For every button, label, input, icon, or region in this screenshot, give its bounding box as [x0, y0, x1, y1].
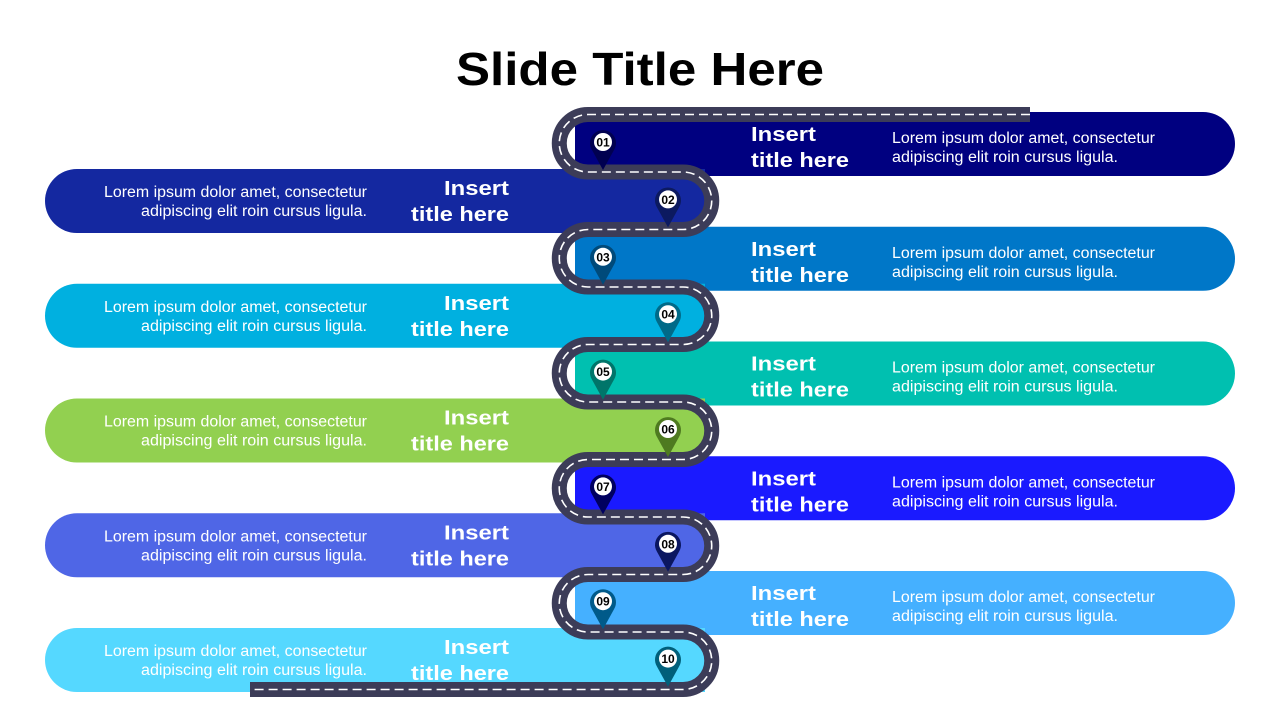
pin 09	[590, 589, 616, 629]
band 03: Lorem ipsum dolor amet, consectetur	[892, 245, 1155, 262]
band 06: title here	[411, 434, 509, 456]
band 05	[575, 342, 1235, 406]
band 09: title here	[751, 609, 849, 631]
band 04	[45, 284, 705, 348]
band 06: Insert	[444, 408, 509, 430]
band 06	[45, 398, 705, 462]
pin 01	[590, 130, 616, 170]
pin 04	[655, 302, 681, 342]
band 10	[45, 628, 705, 692]
band 02: Lorem ipsum dolor amet, consectetur	[104, 184, 367, 201]
band 05: Insert	[751, 354, 816, 376]
band 07: Lorem ipsum dolor amet, consectetur	[892, 474, 1155, 491]
band 05: Lorem ipsum dolor amet, consectetur	[892, 360, 1155, 376]
band 02: title here	[411, 204, 509, 226]
pin 03	[590, 245, 616, 285]
band 08: Insert	[444, 522, 509, 544]
band 02: Insert	[444, 178, 509, 200]
band 04: Insert	[444, 293, 509, 315]
pin 03: 03	[596, 250, 610, 264]
band 02: adipiscing elit roin cursus ligula.	[141, 203, 367, 220]
band 06: Lorem ipsum dolor amet, consectetur	[104, 414, 367, 430]
pin 08: 08	[661, 537, 675, 551]
pin 08	[655, 532, 681, 572]
band 01	[575, 112, 1235, 176]
pin 09: 09	[596, 595, 610, 609]
pin 05	[590, 360, 616, 400]
pin 07	[590, 474, 616, 514]
band 09	[575, 571, 1235, 635]
band 04: title here	[411, 319, 509, 341]
pin 10: 10	[661, 652, 675, 666]
pin 02	[655, 187, 681, 227]
band 07: adipiscing elit roin cursus ligula.	[892, 493, 1118, 510]
band 08: adipiscing elit roin cursus ligula.	[141, 547, 367, 564]
band 03: Insert	[751, 239, 816, 261]
band 01: Lorem ipsum dolor amet, consectetur	[892, 130, 1155, 147]
pin 01: 01	[596, 136, 610, 150]
band 04: Lorem ipsum dolor amet, consectetur	[104, 299, 367, 316]
band 07	[575, 456, 1235, 520]
pin 10	[655, 647, 681, 687]
pin 05: 05	[596, 365, 610, 379]
band 09: Lorem ipsum dolor amet, consectetur	[892, 589, 1155, 606]
band 07: Insert	[751, 468, 816, 490]
band 10: Insert	[444, 637, 509, 659]
band 03: title here	[751, 265, 849, 287]
pin 07: 07	[596, 480, 610, 494]
band 01: adipiscing elit roin cursus ligula.	[892, 149, 1118, 166]
band 05: title here	[751, 380, 849, 402]
band 10: adipiscing elit roin cursus ligula.	[141, 662, 367, 679]
band 08	[45, 513, 705, 577]
band 05: adipiscing elit roin cursus ligula.	[892, 378, 1118, 396]
pin 06: 06	[661, 422, 675, 436]
pin 04: 04	[661, 308, 675, 322]
band 10: title here	[411, 663, 509, 685]
band 01: Insert	[751, 124, 816, 146]
band 10: Lorem ipsum dolor amet, consectetur	[104, 643, 367, 660]
title: Slide Title Here	[456, 43, 824, 95]
band 06: adipiscing elit roin cursus ligula.	[141, 432, 367, 450]
band 09: Insert	[751, 583, 816, 605]
band 01: title here	[751, 150, 849, 172]
band 03	[575, 227, 1235, 291]
band 03: adipiscing elit roin cursus ligula.	[892, 264, 1118, 281]
road	[250, 114, 1030, 690]
pin 06	[655, 417, 681, 457]
pin 02: 02	[661, 193, 675, 207]
band 07: title here	[751, 494, 849, 516]
band 09: adipiscing elit roin cursus ligula.	[892, 608, 1118, 625]
band 08: title here	[411, 548, 509, 570]
band 08: Lorem ipsum dolor amet, consectetur	[104, 528, 367, 545]
band 04: adipiscing elit roin cursus ligula.	[141, 318, 367, 335]
band 02	[45, 169, 705, 233]
